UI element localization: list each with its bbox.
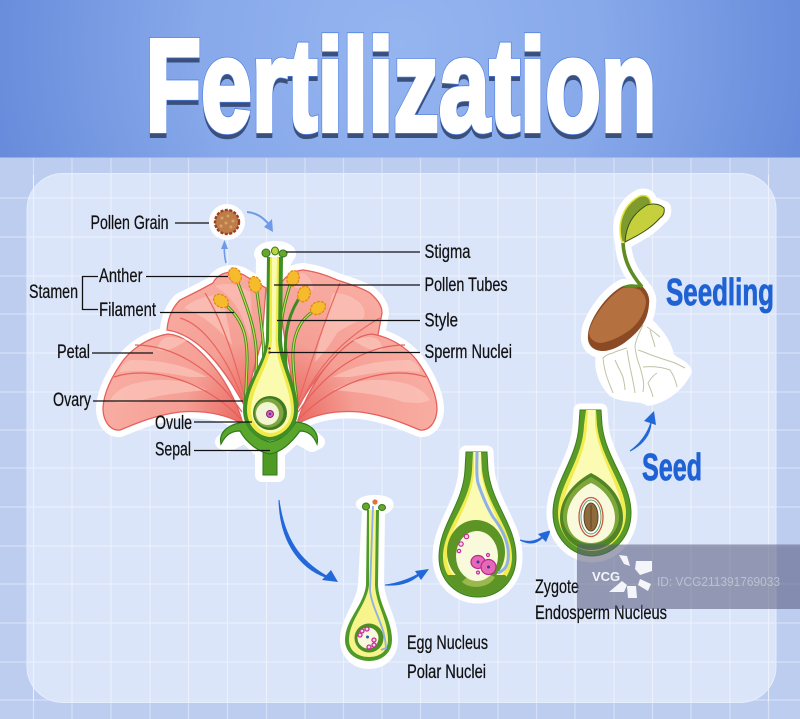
stamens [228, 283, 311, 405]
arrow: flower to pollen tube stage [279, 500, 338, 582]
ovule [253, 396, 287, 430]
label: petal [57, 342, 153, 363]
header banner [0, 0, 800, 158]
label: petal: Petal [57, 342, 90, 363]
label: ovule: Ovule [155, 413, 192, 434]
label: pollen grain: Pollen Grain [90, 213, 168, 234]
label: anther [99, 266, 228, 287]
shoot [623, 243, 642, 287]
stage 2: fertilization in ovule [439, 452, 516, 597]
stigma [262, 247, 287, 257]
heading: seed: Seed [642, 447, 702, 489]
label: ovule [155, 413, 252, 434]
sepals [221, 422, 317, 454]
stage 3: zygote and endosperm [553, 410, 631, 556]
label: filament: Filament [99, 300, 157, 321]
seed body [588, 284, 649, 351]
arrow: stage 2 to stage 3 [520, 530, 551, 543]
anthers [211, 266, 328, 317]
arrow: anther to pollen grain [221, 240, 228, 263]
stage 1: pollen tube reaches ovule [345, 499, 393, 664]
label: zygote: Zygote [535, 577, 579, 598]
arrow: stage 1 to stage 2 [385, 569, 429, 585]
back right petal [277, 270, 382, 410]
label: polar nuclei: Polar Nuclei [407, 662, 486, 683]
label: sperm nuclei: Sperm Nuclei [424, 342, 512, 363]
label: stamen bracket: Stamen [29, 282, 78, 303]
label: sepal: Sepal [155, 440, 191, 460]
watermark: VCG [592, 569, 620, 584]
labels: flower left [29, 213, 270, 460]
seedling [588, 195, 690, 404]
arrow: stage 3 to seedling [630, 411, 656, 451]
label: stigma: Stigma [424, 242, 471, 263]
label: egg nucleus: Egg Nucleus [407, 633, 488, 654]
label: stamen bracket [29, 276, 98, 310]
label: anther: Anther [99, 266, 143, 287]
label: sepal [155, 440, 270, 460]
sperm nuclei dots [268, 347, 271, 354]
labels: flower right [270, 242, 512, 363]
back left petal [167, 272, 266, 405]
stem [263, 447, 277, 475]
flower diagram [103, 247, 437, 475]
watermark [577, 544, 800, 609]
flower white outline [103, 248, 437, 475]
seedling white outline [588, 195, 690, 404]
leaves [620, 195, 651, 242]
watermark: ID: VCG211391769033 [657, 575, 780, 589]
label: filament [99, 300, 234, 321]
pollen grain [209, 204, 245, 240]
left outer petal [103, 334, 243, 430]
label: pollen tubes: Pollen Tubes [424, 275, 508, 296]
roots [603, 325, 685, 397]
label: style: Style [424, 310, 458, 332]
label: ovary: Ovary [53, 390, 91, 411]
ovary and style [243, 257, 298, 441]
arrow: pollen grain to stigma [247, 212, 273, 232]
main panel [27, 174, 776, 702]
right outer petal [297, 334, 437, 430]
label: endosperm nucleus: Endosperm Nucleus [535, 603, 667, 624]
